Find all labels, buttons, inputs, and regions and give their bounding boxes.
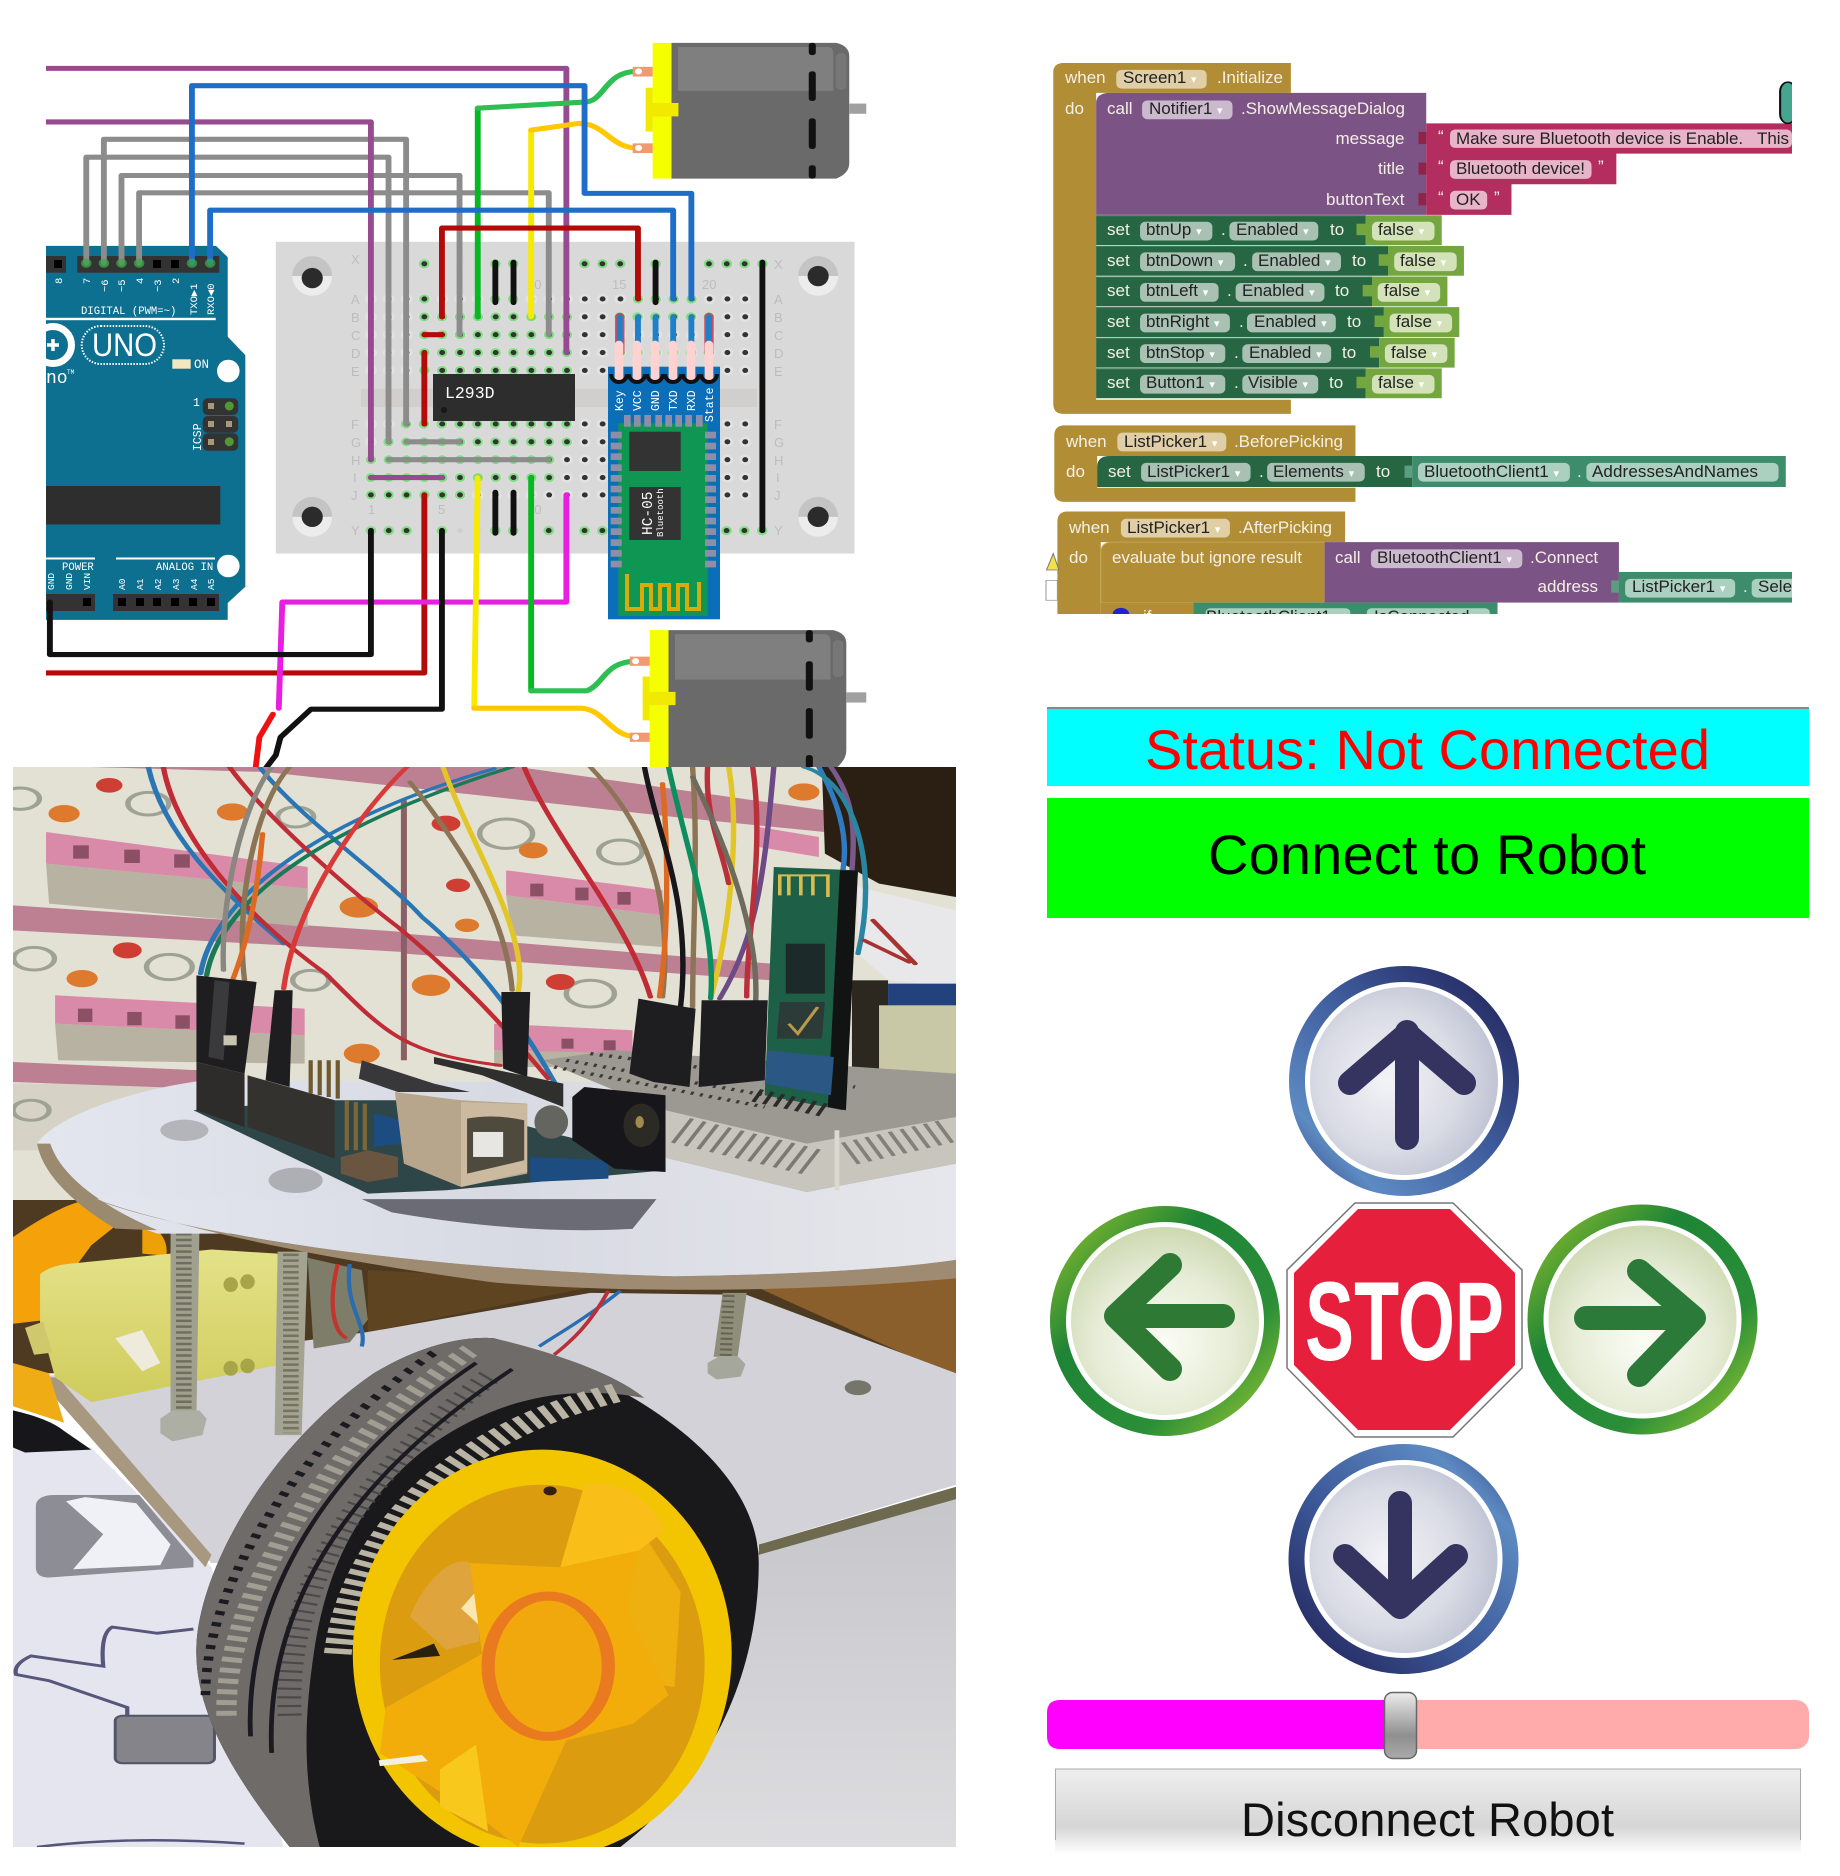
block labels: ListPicker1.AfterPicking: Selection xyxy=(1758,577,1828,596)
breadboard: C xyxy=(774,328,783,343)
block labels: ListPicker1.AfterPicking: do xyxy=(1069,548,1088,567)
block labels: ListPicker1.AfterPicking: BluetoothClient1 xyxy=(1206,607,1331,626)
block labels: Screen1.Initialize: Enabled ▾ xyxy=(1242,281,1315,300)
block labels: Screen1.Initialize: set xyxy=(1107,220,1130,239)
photo: Arduino board, USB port and power jack xyxy=(193,1057,666,1194)
Arduino UNO board: 8 xyxy=(54,278,66,284)
block labels: Screen1.Initialize: buttonText xyxy=(1326,190,1405,209)
block labels: Screen1.Initialize: Enabled ▾ xyxy=(1236,220,1309,239)
block labels: Screen1.Initialize: when xyxy=(1064,68,1106,87)
breadboard: F xyxy=(774,417,782,432)
breadboard: C xyxy=(351,328,360,343)
L293D motor driver chip xyxy=(433,374,575,421)
block labels: Screen1.Initialize: .ShowMessageDialog xyxy=(1241,99,1405,118)
photo: rear wheel and gearmotor xyxy=(13,1200,747,1453)
Arduino UNO board: A0 xyxy=(117,578,128,590)
HC-05 Bluetooth module: RXD xyxy=(686,390,699,411)
Arduino UNO board: A2 xyxy=(153,578,164,590)
block labels: Screen1.Initialize: set xyxy=(1107,343,1130,362)
breadboard: E xyxy=(351,364,360,379)
block labels: Screen1.Initialize: Button1 ▾ xyxy=(1146,373,1215,392)
icon: right arrow button xyxy=(1528,1204,1758,1434)
block labels: Screen1.Initialize: call xyxy=(1107,99,1133,118)
block labels: Screen1.Initialize: btnUp ▾ xyxy=(1146,220,1202,239)
breadboard: B xyxy=(351,310,360,325)
block labels: ListPicker1.BeforePicking: Elements ▾ xyxy=(1273,462,1355,481)
breadboard xyxy=(276,242,855,554)
HC-05 Bluetooth module: GND xyxy=(650,390,663,411)
panel: robot control app screen xyxy=(1047,707,1809,1854)
block labels: Screen1.Initialize: Enabled ▾ xyxy=(1258,251,1331,270)
block labels: Screen1.Initialize: false ▾ xyxy=(1391,343,1438,362)
block labels: ListPicker1.AfterPicking: .AfterPicking xyxy=(1238,518,1332,537)
block labels: Screen1.Initialize: “ xyxy=(1438,188,1444,207)
photo background: drawers xyxy=(1,767,956,1234)
HC-05 Bluetooth module: Key xyxy=(614,390,627,411)
block labels: Screen1.Initialize: Make sure Bluetooth device is Enable. This xyxy=(1456,129,1789,148)
bottom DC motor xyxy=(630,630,866,770)
status bar xyxy=(1047,707,1809,786)
speed slider xyxy=(1047,1692,1809,1758)
block labels: Screen1.Initialize: Screen1 ▾ xyxy=(1123,68,1197,87)
block labels: Screen1.Initialize xyxy=(1064,68,1789,392)
block labels: Screen1.Initialize: title xyxy=(1378,159,1404,178)
block labels: ListPicker1.BeforePicking: do xyxy=(1066,462,1085,481)
photo: jumper connectors xyxy=(196,975,768,1087)
block labels: Screen1.Initialize: false ▾ xyxy=(1384,281,1431,300)
block labels: Screen1.Initialize: . xyxy=(1239,312,1244,331)
icon: left arrow button xyxy=(1050,1206,1280,1436)
block labels: Screen1.Initialize: . xyxy=(1221,220,1226,239)
Arduino UNO board: ~5 xyxy=(117,279,129,292)
Arduino UNO board: DIGITAL (PWM=~) xyxy=(81,306,176,318)
block labels: ListPicker1.BeforePicking: ListPicker1 ▾ xyxy=(1124,432,1218,451)
breadboard: 10 xyxy=(527,502,541,517)
Arduino UNO board: VIN xyxy=(82,573,93,590)
block labels: ListPicker1.BeforePicking xyxy=(1066,435,1758,477)
breadboard: H xyxy=(351,453,360,468)
Arduino UNO board: TXO▶1 xyxy=(189,283,201,315)
breadboard: I xyxy=(353,470,357,485)
block labels: Screen1.Initialize: to xyxy=(1335,281,1349,300)
block labels: Screen1.Initialize: to xyxy=(1352,251,1366,270)
block labels: ListPicker1.BeforePicking: . xyxy=(1577,462,1582,481)
Arduino UNO board: 7 xyxy=(82,278,94,284)
block labels: Screen1.Initialize: to xyxy=(1347,312,1361,331)
Arduino UNO board: ICSP xyxy=(192,423,205,451)
Arduino UNO board: GND xyxy=(64,573,75,590)
icon: stop sign: STOP xyxy=(1305,1259,1504,1384)
breadboard: 15 xyxy=(612,277,626,292)
Arduino UNO board: 4 xyxy=(135,278,147,284)
block labels: Screen1.Initialize: do xyxy=(1065,99,1084,118)
icon: stop sign xyxy=(1287,1203,1522,1437)
breadboard: X xyxy=(774,257,783,272)
block labels: Screen1.Initialize: ” xyxy=(1598,157,1604,176)
Arduino UNO board: UNO xyxy=(92,327,157,363)
HC-05 Bluetooth module: Bluetooth xyxy=(656,488,666,537)
Arduino UNO board: 2 xyxy=(171,278,183,284)
disconnect button: Disconnect Robot xyxy=(1241,1793,1614,1846)
block labels: Screen1.Initialize: “ xyxy=(1438,127,1444,146)
block labels: ListPicker1.AfterPicking: .Connect xyxy=(1530,548,1598,567)
Arduino UNO board xyxy=(34,246,245,620)
top DC motor xyxy=(633,43,866,179)
breadboard: I xyxy=(776,470,780,485)
block labels: ListPicker1.BeforePicking: . xyxy=(1259,462,1264,481)
block labels: Screen1.Initialize: to xyxy=(1330,220,1344,239)
block labels: ListPicker1.AfterPicking: if xyxy=(1143,607,1152,626)
breadboard: E xyxy=(774,364,783,379)
Arduino UNO board: POWER xyxy=(62,562,94,574)
block labels: Screen1.Initialize: ” xyxy=(1494,188,1500,207)
panel: car photograph xyxy=(1,767,956,1858)
block labels: Screen1.Initialize: set xyxy=(1107,251,1130,270)
breadboard: B xyxy=(774,310,783,325)
block labels: Screen1.Initialize: set xyxy=(1107,373,1130,392)
HC-05 Bluetooth module: TXD xyxy=(668,390,681,411)
breadboard: G xyxy=(351,435,361,450)
Arduino UNO board: ANALOG IN xyxy=(156,562,213,574)
block labels: Screen1.Initialize: btnRight ▾ xyxy=(1146,312,1220,331)
block labels: Screen1.Initialize: Notifier1 ▾ xyxy=(1149,99,1223,118)
Arduino UNO board: 1 xyxy=(193,397,200,410)
block labels: Screen1.Initialize: Enabled ▾ xyxy=(1254,312,1327,331)
HC-05 Bluetooth module xyxy=(608,345,720,619)
Arduino UNO board: ~3 xyxy=(153,279,165,292)
block labels: Screen1.Initialize: .Initialize xyxy=(1217,68,1283,87)
block labels: ListPicker1.AfterPicking: evaluate but ignore result xyxy=(1112,548,1302,567)
HC-05 Bluetooth module: State xyxy=(704,387,717,422)
breadboard: F xyxy=(351,417,359,432)
Arduino UNO board: no xyxy=(46,369,68,389)
status bar: Status: Not Connected xyxy=(1145,718,1710,781)
block labels: Screen1.Initialize: false ▾ xyxy=(1378,373,1425,392)
icon: down arrow button xyxy=(1288,1444,1518,1674)
block labels: Screen1.Initialize: btnLeft ▾ xyxy=(1146,281,1209,300)
breadboard: J xyxy=(351,488,358,503)
connect button xyxy=(1047,798,1809,918)
breadboard: Y xyxy=(351,523,360,538)
block labels: Screen1.Initialize: false ▾ xyxy=(1378,220,1425,239)
breadboard: J xyxy=(774,488,780,503)
block labels: ListPicker1.BeforePicking: BluetoothClient1 ▾ xyxy=(1424,462,1559,481)
photo: clear breadboard xyxy=(542,1050,956,1192)
block labels: Screen1.Initialize: false ▾ xyxy=(1400,251,1447,270)
block labels: ListPicker1.BeforePicking: when xyxy=(1065,432,1107,451)
block labels: Screen1.Initialize: false ▾ xyxy=(1396,312,1443,331)
photo: jumper wires xyxy=(148,767,915,1082)
breadboard: 20 xyxy=(702,277,716,292)
photo: chassis lower plate, table and paper icons xyxy=(13,1200,956,1847)
HC-05 Bluetooth module: VCC xyxy=(632,390,645,411)
block shapes xyxy=(1046,63,1798,620)
block labels: ListPicker1.AfterPicking: BluetoothClient1 ▾ xyxy=(1377,548,1512,567)
block labels: Screen1.Initialize: btnDown ▾ xyxy=(1146,251,1224,270)
photo: HC-05 Bluetooth module xyxy=(756,867,858,1110)
block labels: ListPicker1.AfterPicking: when xyxy=(1068,518,1110,537)
breadboard: A xyxy=(351,292,360,307)
block labels: Screen1.Initialize: to xyxy=(1329,373,1343,392)
breadboard: D xyxy=(351,346,360,361)
Arduino UNO board: GND xyxy=(46,573,57,590)
breadboard: 5 xyxy=(438,502,445,517)
block labels: ListPicker1.BeforePicking: to xyxy=(1376,462,1390,481)
breadboard: 10 xyxy=(527,277,541,292)
block labels: ListPicker1.AfterPicking: ListPicker1 ▾ xyxy=(1632,577,1726,596)
breadboard: H xyxy=(774,453,783,468)
block labels: ListPicker1.AfterPicking: ListPicker1 ▾ xyxy=(1127,518,1221,537)
breadboard: 1 xyxy=(368,502,375,517)
panel: App Inventor code blocks xyxy=(1046,63,1828,626)
breadboard: D xyxy=(774,346,783,361)
block labels: Screen1.Initialize: . xyxy=(1243,251,1248,270)
block labels: Screen1.Initialize: set xyxy=(1107,312,1130,331)
icon: up arrow button xyxy=(1289,966,1519,1196)
photo: front wheel xyxy=(196,1338,759,1858)
breadboard: G xyxy=(774,435,784,450)
block labels: Screen1.Initialize: Bluetooth device! xyxy=(1456,159,1585,178)
block labels: ListPicker1.BeforePicking: AddressesAndNames xyxy=(1592,462,1758,481)
block labels: Screen1.Initialize: . xyxy=(1234,373,1239,392)
panel: breadboard circuit diagram xyxy=(34,43,866,770)
HC-05 Bluetooth module: HC-05 xyxy=(641,491,657,535)
block labels: ListPicker1.AfterPicking: IsConnected xyxy=(1374,607,1469,626)
photo: top disc xyxy=(37,1080,956,1290)
breadboard: Y xyxy=(774,523,783,538)
block labels: ListPicker1.AfterPicking: . xyxy=(1743,577,1748,596)
block labels: Screen1.Initialize: set xyxy=(1107,281,1130,300)
disconnect button xyxy=(1055,1769,1801,1854)
Arduino UNO board: TM xyxy=(67,369,75,376)
block labels: ListPicker1.BeforePicking: ListPicker1 ▾ xyxy=(1147,462,1241,481)
block labels: Screen1.Initialize: Enabled ▾ xyxy=(1249,343,1322,362)
block labels: Screen1.Initialize: “ xyxy=(1438,157,1444,176)
breadboard: A xyxy=(774,292,783,307)
block labels: Screen1.Initialize: to xyxy=(1342,343,1356,362)
breadboard: X xyxy=(351,252,360,267)
Arduino UNO board: A5 xyxy=(206,578,217,590)
Arduino UNO board: A3 xyxy=(171,578,182,590)
Arduino UNO board: ~6 xyxy=(100,279,112,292)
block labels: ListPicker1.AfterPicking: call xyxy=(1335,548,1361,567)
block labels: Screen1.Initialize: message xyxy=(1336,129,1404,148)
Arduino UNO board: A1 xyxy=(135,578,146,590)
block labels: ListPicker1.BeforePicking: set xyxy=(1108,462,1131,481)
block labels: ListPicker1.AfterPicking: address xyxy=(1538,577,1598,596)
block labels: Screen1.Initialize: . xyxy=(1227,281,1232,300)
block labels: Screen1.Initialize: Visible ▾ xyxy=(1248,373,1308,392)
Arduino UNO board: RXO◀0 xyxy=(206,283,218,315)
Arduino UNO board: A4 xyxy=(189,578,200,590)
connect button: Connect to Robot xyxy=(1208,823,1646,886)
Arduino UNO board: ON xyxy=(194,358,209,372)
L293D motor driver chip: L293D xyxy=(445,384,495,403)
block labels: ListPicker1.AfterPicking xyxy=(1068,518,1828,626)
block labels: Screen1.Initialize: btnStop ▾ xyxy=(1146,343,1215,362)
block labels: ListPicker1.BeforePicking: .BeforePicking xyxy=(1234,432,1343,451)
block labels: Screen1.Initialize: . xyxy=(1234,343,1239,362)
wires xyxy=(46,68,762,770)
block labels: Screen1.Initialize: OK xyxy=(1456,190,1481,209)
